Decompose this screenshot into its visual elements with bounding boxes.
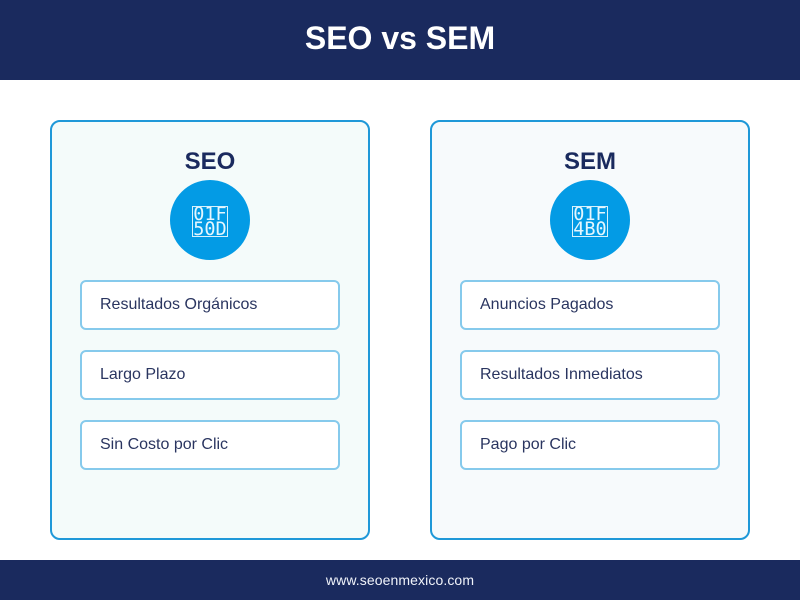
- item: paid ads: Anuncios Pagados: [480, 296, 613, 313]
- panel: SEO: [50, 120, 370, 540]
- footer: [0, 560, 800, 600]
- item: long term: Largo Plazo: [100, 366, 185, 383]
- item: no cost per click: [80, 420, 340, 470]
- icon: missing-glyph box 01F50D: [170, 180, 250, 260]
- item: long term: [80, 350, 340, 400]
- heading: SEO: SEO: [185, 148, 235, 175]
- item: paid ads: [460, 280, 720, 330]
- footer: www.seoenmexico.com: [326, 572, 474, 588]
- item: no cost per click: Sin Costo por Clic: [100, 436, 228, 453]
- panel: SEM: [430, 120, 750, 540]
- heading: SEM: SEM: [564, 148, 616, 175]
- item: pay per click: Pago por Clic: [480, 436, 576, 453]
- item: organic results: [80, 280, 340, 330]
- item: immediate results: Resultados Inmediatos: [480, 366, 643, 383]
- title: SEO vs SEM: [305, 20, 495, 56]
- header banner: [0, 0, 800, 80]
- item: pay per click: [460, 420, 720, 470]
- item: immediate results: [460, 350, 720, 400]
- item: organic results: Resultados Orgánicos: [100, 296, 257, 313]
- icon: missing-glyph box 01F4B0: [550, 180, 630, 260]
